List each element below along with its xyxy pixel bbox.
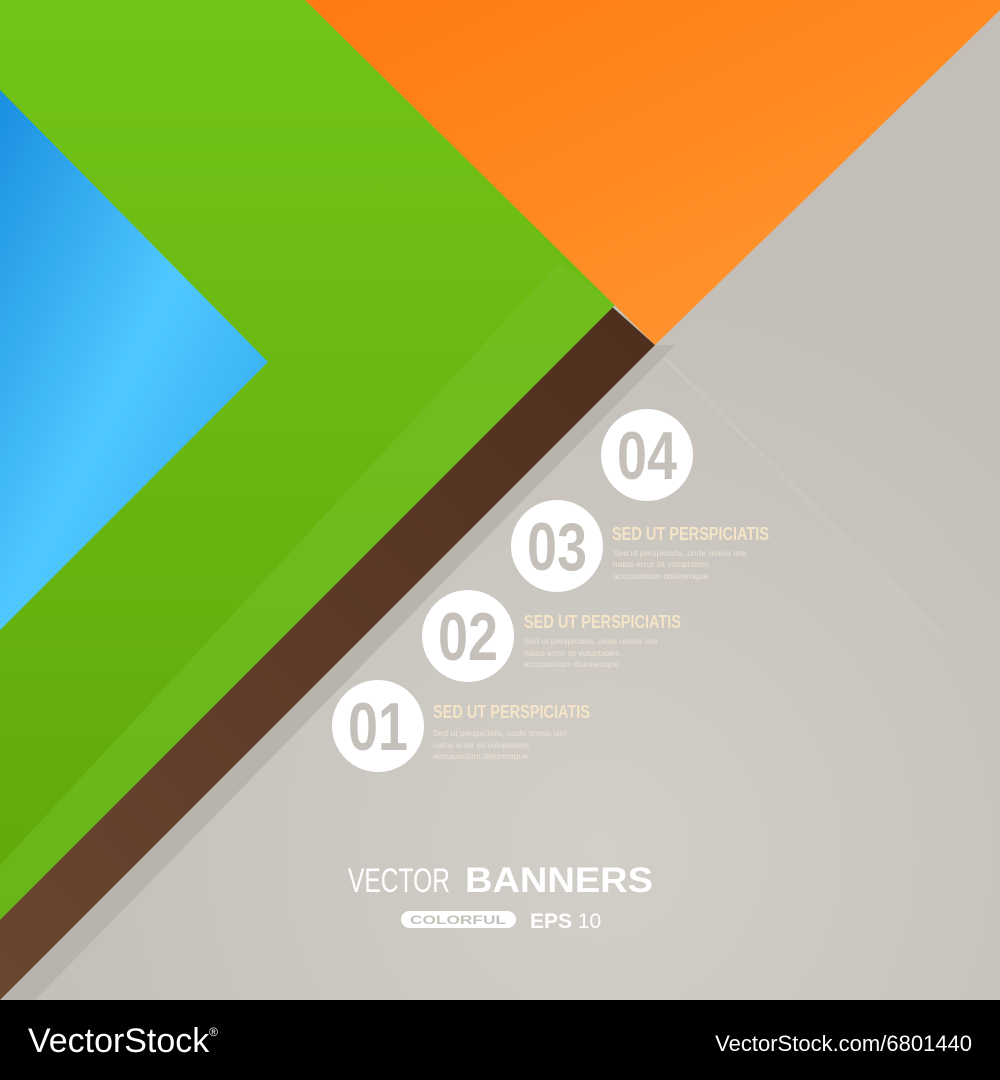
footer bar: VectorStock.com/6801440 [715, 1031, 972, 1056]
green light stripe [0, 262, 615, 920]
footer bar: VectorStock [28, 1022, 209, 1060]
step 04 [601, 409, 693, 501]
faint diagonal line [652, 345, 945, 638]
step 02: natus error sit voluptatem [524, 648, 620, 658]
step 02 [422, 590, 681, 682]
step 02: accusantium doloremque [524, 659, 619, 669]
footer bar: ® [209, 1025, 218, 1039]
badge: colorful eps 10: COLORFUL [410, 913, 506, 927]
panel: brown band [0, 305, 655, 1000]
shadow band below brown [0, 345, 675, 1000]
badge: colorful eps 10 [401, 910, 601, 933]
step 01: 01 [348, 689, 408, 765]
step 03: natus error sit voluptatem [613, 559, 709, 569]
step 02: Sed ut perspiciatis, unde omnis iste [524, 636, 658, 646]
step 01: SED UT PERSPICIATIS [433, 702, 590, 722]
step 03: 03 [527, 509, 587, 585]
step 02: 02 [438, 599, 498, 675]
step 01: natus error sit voluptatem [433, 740, 529, 750]
step 02: SED UT PERSPICIATIS [524, 612, 681, 632]
footer bar [0, 1000, 1000, 1080]
step 04: 04 [617, 418, 677, 494]
step 01: accusantium doloremque [433, 751, 528, 761]
title: vector banners: VECTOR [348, 862, 450, 900]
step 03: Sed ut perspiciatis, unde omnis iste [613, 548, 747, 558]
step 01 [332, 680, 590, 772]
title: vector banners [348, 861, 653, 900]
step 03: SED UT PERSPICIATIS [612, 524, 769, 544]
step 01: Sed ut perspiciatis, unde omnis iste [433, 728, 567, 738]
title: vector banners: BANNERS [465, 861, 653, 900]
panel: blue [0, 90, 268, 630]
panel: green [0, 0, 615, 920]
panel: orange [305, 0, 1000, 345]
step 03 [511, 500, 769, 592]
badge: colorful eps 10: EPS 10 [530, 910, 601, 933]
step 03: accusantium doloremque [613, 571, 708, 581]
